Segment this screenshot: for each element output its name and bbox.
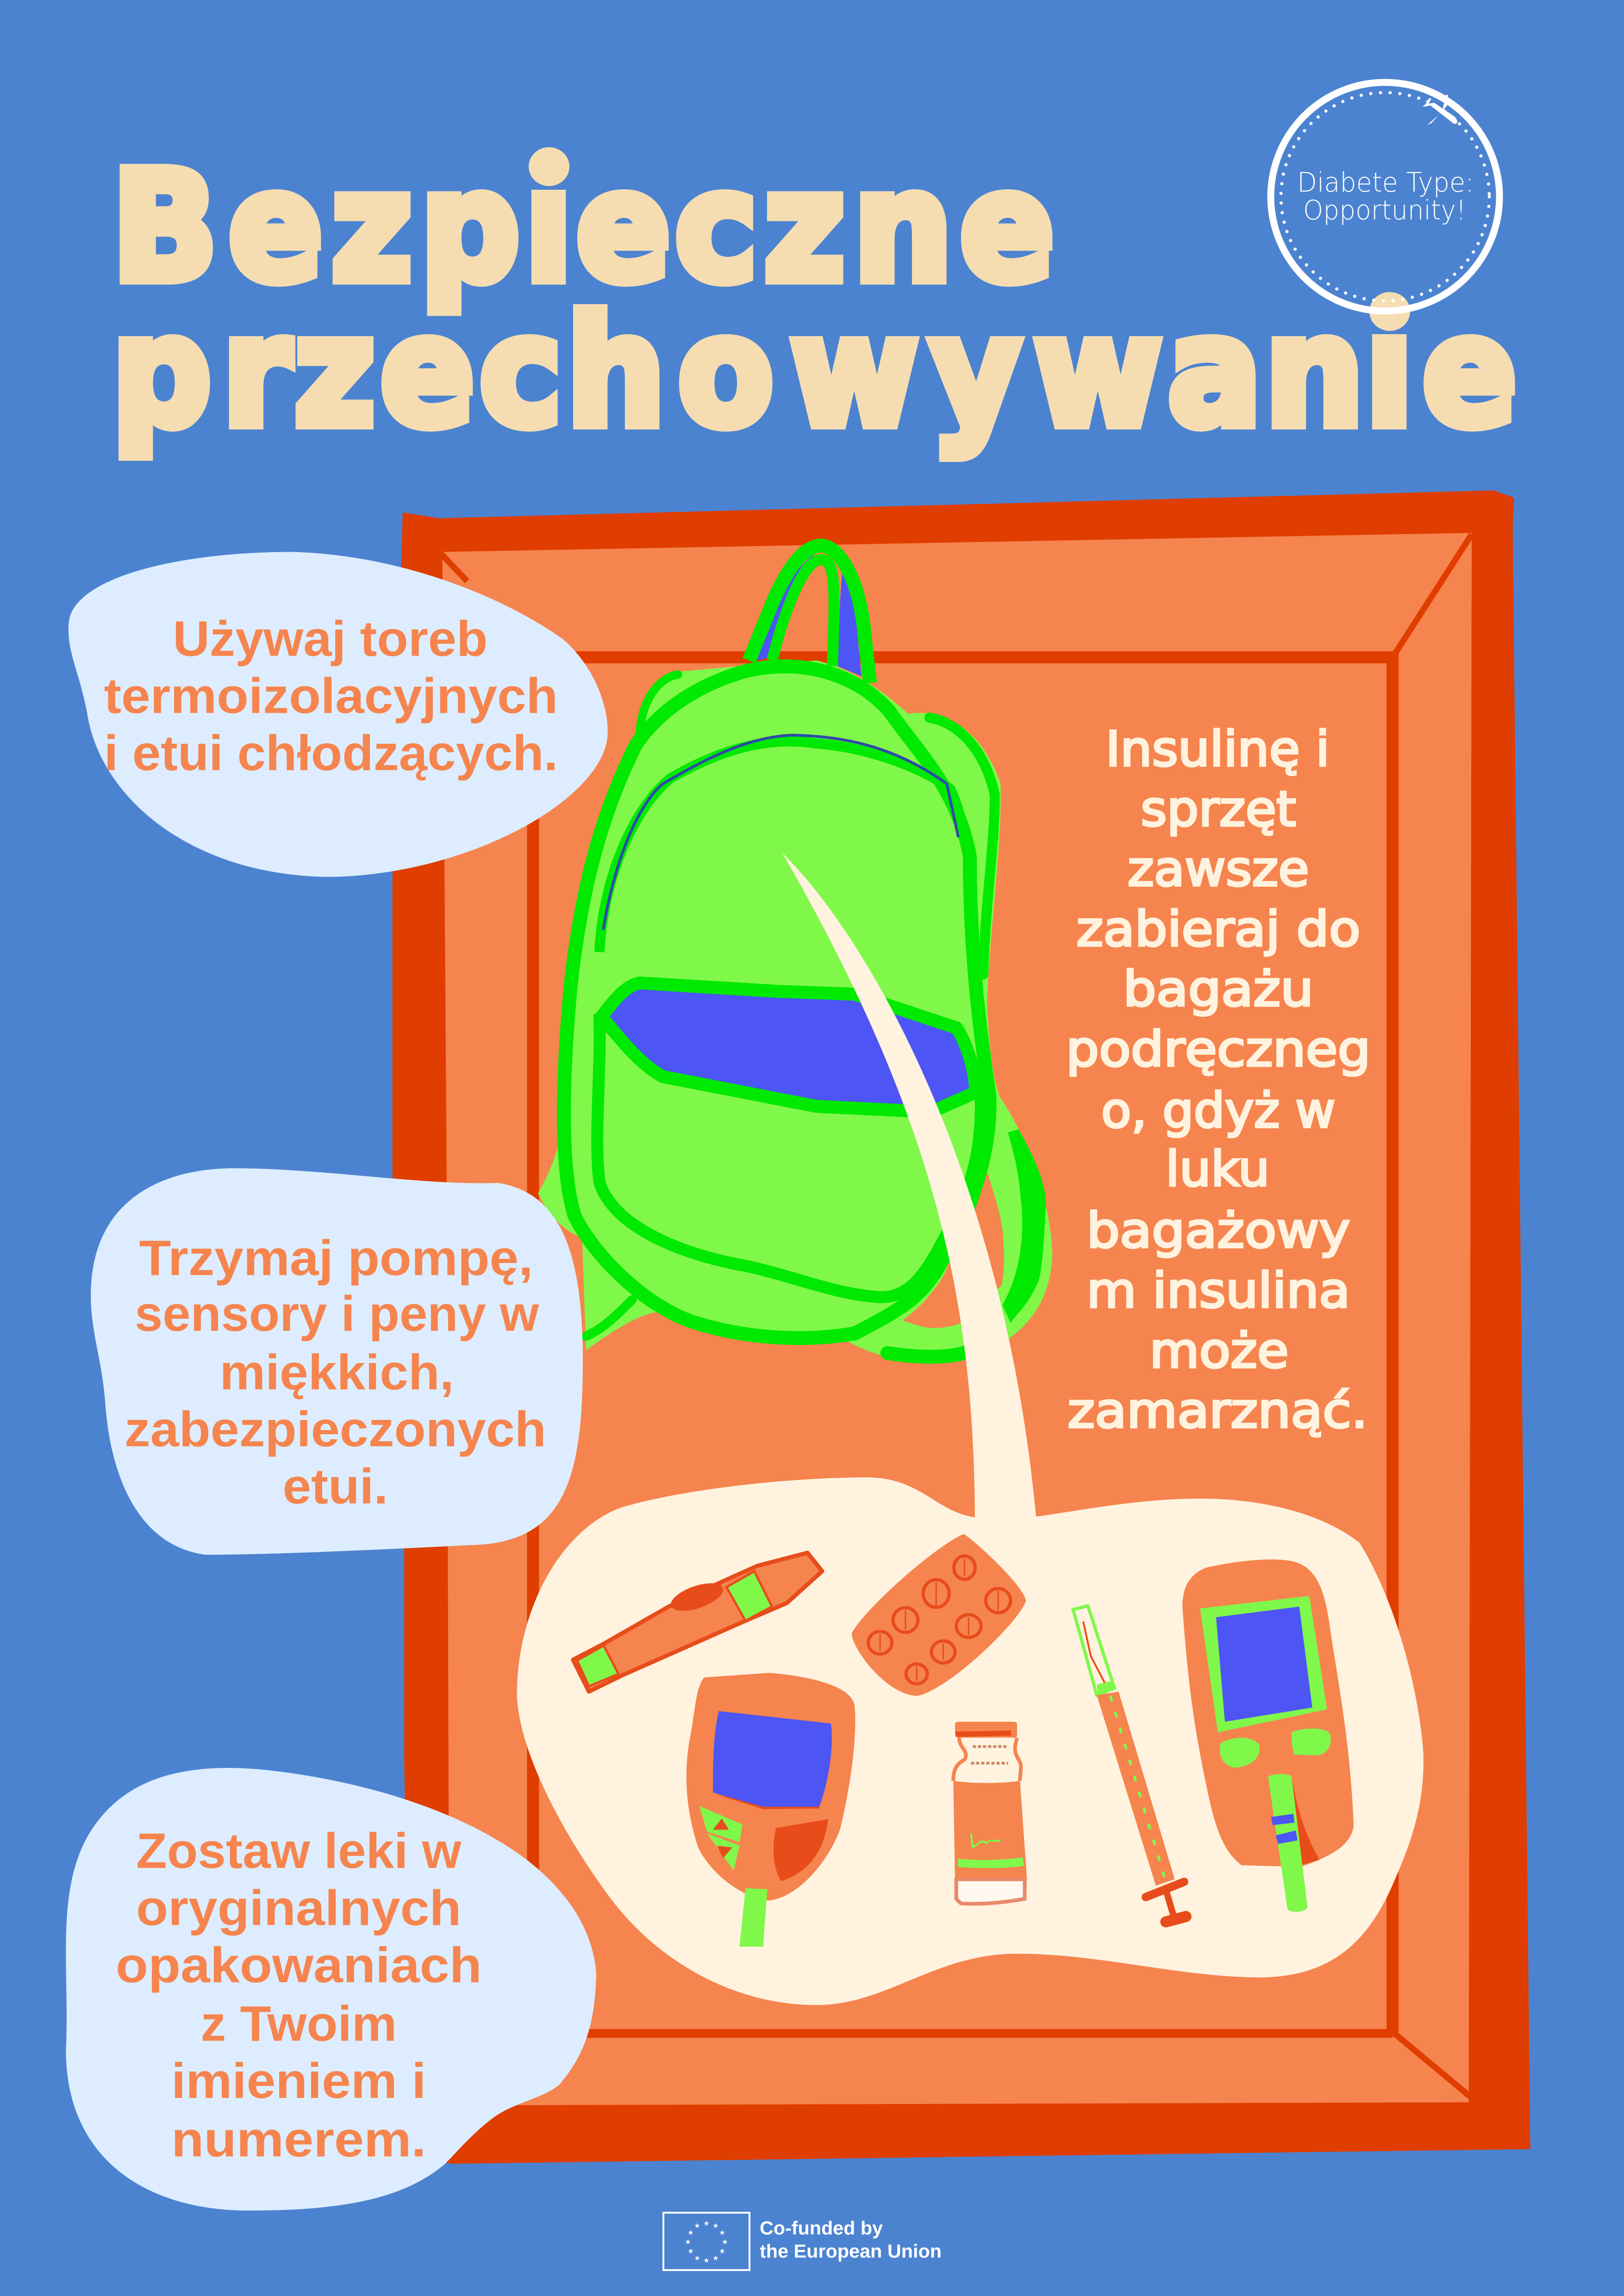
badge text: [1297, 167, 1474, 226]
icon: glucose meter left: [687, 1673, 855, 1947]
text block: hand luggage advice: może: [1149, 1322, 1289, 1379]
text block: hand luggage advice: zawsze: [1128, 841, 1309, 897]
icon: EU stars: ★: [685, 2238, 691, 2246]
title: [112, 139, 1517, 460]
text block: hand luggage advice: zamarznąć.: [1068, 1382, 1368, 1439]
badge text: Diabete Type:: [1297, 167, 1474, 198]
icon: EU stars: ★: [687, 2247, 694, 2255]
text: soft cases: Trzymaj pompę,: [139, 1230, 533, 1286]
icon: EU stars: ★: [722, 2238, 728, 2246]
backpack handle: [749, 546, 870, 683]
icon: EU stars: ★: [712, 2221, 719, 2230]
backpack strap gap: [903, 1168, 1004, 1328]
text block: hand luggage advice: o, gdyż w: [1101, 1083, 1336, 1139]
illustration: green backpack: [538, 546, 1052, 1363]
text: soft cases: etui.: [282, 1459, 388, 1514]
text: thermal bags: [104, 611, 558, 781]
text: original packaging: [116, 1823, 482, 2167]
icon: plane: [1423, 95, 1457, 125]
text block: hand luggage advice: podręczneg: [1066, 1021, 1371, 1077]
callout: original packaging tip: [66, 1768, 596, 2210]
title: przechowywanie: [112, 284, 1517, 460]
icon: blister pack of pills: [852, 1534, 1026, 1696]
text: thermal bags: Używaj toreb: [173, 611, 487, 666]
text: co-funded: [760, 2217, 942, 2262]
text: original packaging: imieniem i: [171, 2053, 426, 2109]
text: original packaging: numerem.: [171, 2111, 426, 2167]
text: original packaging: Zostaw leki w: [136, 1823, 462, 1879]
text: soft cases: [125, 1230, 546, 1514]
icon: EU stars: ★: [712, 2254, 719, 2262]
text: soft cases: miękkich,: [219, 1344, 454, 1400]
text block: hand luggage advice: m insulina: [1087, 1263, 1350, 1319]
icon: EU stars: ★: [694, 2221, 700, 2230]
text: thermal bags: termoizolacyjnych: [104, 668, 558, 723]
text block: hand luggage advice: bagażowy: [1087, 1202, 1350, 1259]
text block: hand luggage advice: sprzęt: [1141, 781, 1296, 837]
badge text: Opportunity!: [1303, 194, 1466, 226]
callout: zoom pointer and supplies bubble: [517, 853, 1424, 2005]
illustration: diabetes supplies: [573, 1534, 1354, 1947]
icon: EU stars: ★: [719, 2247, 725, 2255]
text: original packaging: z Twoim: [200, 1996, 397, 2052]
panel: suitcase frame: [393, 491, 1530, 2164]
icon: EU stars: ★: [703, 2219, 710, 2228]
text block: hand luggage advice: zabieraj do: [1076, 901, 1361, 957]
backpack right strap: [1002, 1129, 1046, 1323]
backpack outline: [564, 666, 989, 1338]
callout: soft cases tip: [91, 1168, 583, 1555]
icon: insulin syringe pen: [1073, 1606, 1186, 1922]
text: soft cases: sensory i peny w: [135, 1286, 539, 1341]
text block: hand luggage advice: luku: [1166, 1141, 1269, 1197]
icon: EU stars: [685, 2219, 728, 2265]
icon: lancing device: [573, 1553, 822, 1692]
backpack zipper: [600, 735, 970, 952]
text: original packaging: opakowaniach: [116, 1937, 482, 1993]
icon: insulin vial: [953, 1722, 1027, 1904]
backpack pocket: [597, 983, 981, 1297]
text: thermal bags: i etui chłodzących.: [104, 725, 558, 781]
icon: EU stars: ★: [719, 2228, 725, 2237]
icon: EU stars: ★: [703, 2256, 710, 2265]
text: original packaging: oryginalnych: [136, 1880, 461, 1936]
icon: EU stars: ★: [694, 2254, 700, 2262]
logo: EU co-funding: [663, 2213, 942, 2270]
text block: hand luggage advice: bagażu: [1123, 961, 1313, 1017]
text: co-funded: Co-funded by: [760, 2217, 883, 2239]
title: Bezpieczne: [112, 139, 1054, 315]
callout: thermal bags tip: [69, 552, 608, 877]
backpack light body: [538, 660, 1052, 1363]
text: co-funded: the European Union: [760, 2240, 942, 2262]
text block: hand luggage advice: [1066, 721, 1371, 1439]
text: soft cases: zabezpieczonych: [125, 1401, 546, 1457]
icon: EU stars: ★: [687, 2228, 694, 2237]
text block: hand luggage advice: Insulinę i: [1106, 721, 1330, 777]
badge: Diabete Type Opportunity: [1271, 82, 1499, 311]
icon: glucose meter right: [1182, 1559, 1354, 1912]
backpack straps: [586, 674, 995, 1357]
